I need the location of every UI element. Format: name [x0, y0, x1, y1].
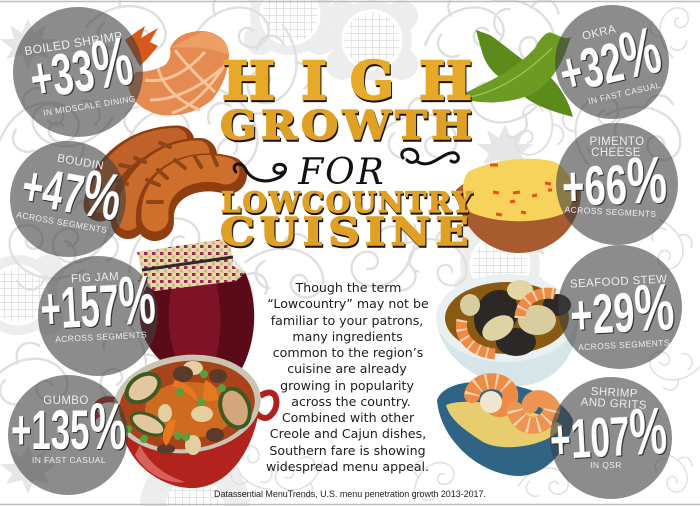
stat: pimento cheese: +66% — [561, 143, 668, 221]
body text: Combined with other — [282, 410, 415, 425]
title — [220, 51, 473, 254]
stat: shrimp and grits: IN QSR — [590, 460, 622, 470]
stat: shrimp and grits — [548, 377, 672, 499]
stat: gumbo: +135% — [11, 390, 126, 464]
body text: familiar to your patrons, — [271, 313, 423, 328]
title: GROWTH — [220, 103, 472, 149]
body text: growing in popularity — [280, 378, 414, 393]
stat: okra: IN FAST CASUAL — [587, 80, 661, 106]
body text: widespread menu appeal. — [266, 459, 429, 474]
illustration: seafood stew bowl — [436, 274, 578, 386]
body text: common to the region’s — [273, 345, 423, 360]
body text: across the country. — [291, 394, 411, 409]
stat: shrimp and grits: AND GRITS — [580, 396, 647, 412]
title: CUISINE — [220, 210, 469, 254]
stat: boudin: ACROSS SEGMENTS — [16, 209, 108, 235]
stat: gumbo: GUMBO — [43, 395, 89, 407]
illustration: okra — [457, 30, 573, 117]
stat: fig jam: +157% — [38, 261, 157, 344]
title: H — [222, 51, 275, 112]
stat: seafood stew — [558, 245, 682, 369]
stat: fig jam — [38, 256, 158, 376]
stat: boiled shrimp: IN MIDSCALE DINING — [42, 93, 136, 118]
stat: boudin: +47% — [17, 146, 127, 236]
stat: pimento cheese — [556, 123, 678, 245]
source note: Datassential MenuTrends, U.S. menu penetration growth 2013-2017. — [214, 489, 486, 499]
body text: Creole and Cajun dishes, — [270, 426, 426, 441]
stat: gumbo: IN FAST CASUAL — [32, 455, 106, 465]
title: I — [301, 51, 327, 112]
stat: fig jam: FIG JAM — [71, 271, 119, 285]
body text — [266, 280, 429, 474]
illustration: fig jam jar — [137, 238, 254, 372]
stat: pimento cheese: PIMENTO — [590, 136, 644, 148]
stat: seafood stew: SEAFOOD STEW — [570, 273, 668, 291]
stat: okra: OKRA — [581, 23, 617, 43]
stat: pimento cheese: ACROSS SEGMENTS — [564, 204, 657, 219]
stat: seafood stew: ACROSS SEGMENTS — [578, 337, 670, 352]
stat: fig jam: ACROSS SEGMENTS — [55, 329, 147, 344]
stat: boiled shrimp — [13, 7, 143, 137]
body text: many ingredients — [292, 329, 403, 344]
illustration: shrimp — [125, 26, 229, 115]
body text: “Lowcountry” may not be — [267, 296, 429, 311]
title: G — [350, 51, 394, 112]
body text: Though the term — [295, 280, 401, 295]
stat: seafood stew: +29% — [568, 270, 676, 350]
illustration: pimento cheese bowl — [456, 159, 581, 253]
body text: cuisine are already — [287, 361, 407, 376]
stat: gumbo — [8, 375, 128, 495]
stat: boudin — [10, 141, 127, 257]
body text: Southern fare is showing — [269, 443, 426, 458]
stat: pimento cheese: CHEESE — [591, 147, 641, 159]
illustration: shrimp and grits bowl — [437, 381, 573, 476]
stat: okra: +32% — [552, 13, 668, 108]
stat: boiled shrimp: +33% — [24, 22, 138, 114]
title: LOWCOUNTRY — [221, 186, 473, 219]
title: H — [419, 51, 472, 112]
stat: shrimp and grits: SHRIMP — [591, 386, 638, 400]
stat: boiled shrimp: BOILED SHRIMP — [23, 29, 124, 58]
illustration: sausages — [100, 139, 228, 222]
stat: shrimp and grits: +107% — [548, 394, 669, 474]
illustration: gumbo pot — [95, 348, 276, 488]
title: FOR — [297, 152, 386, 193]
stat: boudin: BOUDIN — [56, 153, 105, 173]
